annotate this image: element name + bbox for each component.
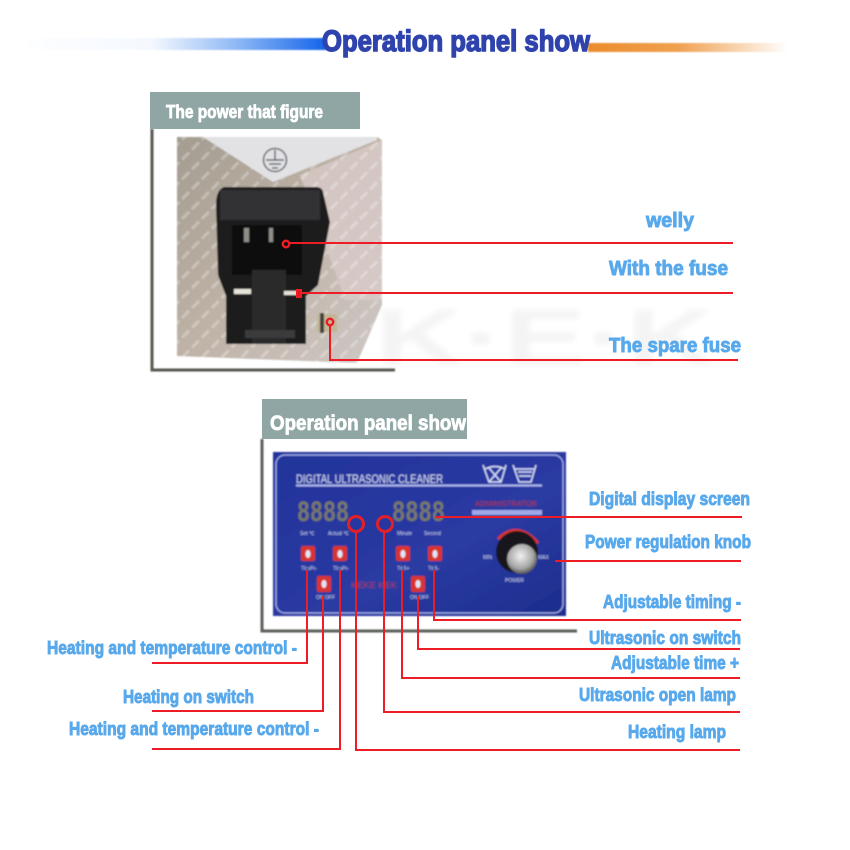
wash icons [483,465,536,482]
blue streak [10,38,326,50]
photo: blue control panel: ON OFF [410,595,429,601]
leader lines [152,243,742,750]
plug socket [216,187,330,344]
title banner [10,25,788,58]
photo: blue control panel: 8888 [392,497,445,531]
label: with the fuse: With the fuse [609,258,728,280]
panel: operation panel [262,399,577,631]
photo: blue control panel: ON OFF [316,595,335,601]
photo: blue control panel: MIN [483,555,493,561]
heading: The power that figure [166,102,323,122]
label: heating on switch: Heating on switch [123,687,254,707]
spare fuse [317,314,337,332]
photo: blue control panel: Second [424,531,441,537]
knob [498,530,538,543]
label: ultrasonic open lamp: Ultrasonic open lamp [579,685,736,705]
device name: DIGITAL ULTRASONIC CLEANER [296,472,443,486]
label: digital display: Digital display screen [589,489,750,509]
photo: blue control panel: MAX [538,555,550,561]
label: heating control two: Heating and temperature control - [69,719,319,739]
buttons [301,546,442,592]
label: welly: welly [645,210,695,232]
label: adjustable timing: Adjustable timing - [603,592,741,612]
label: power knob: Power regulation knob [585,532,751,552]
label: spare fuse: The spare fuse [609,335,741,357]
frame shadow [152,129,395,370]
photo: blue control panel: POWER [505,578,524,584]
photo: blue control panel: Tit 5- [428,566,440,572]
heading [150,92,360,129]
panel: power figure [150,92,395,370]
heading [262,399,467,439]
background watermark: K·E·K [375,293,715,382]
brand stamp: KEKE KEK [351,581,398,590]
icon: ground symbol [264,148,286,172]
photo: blue control panel: Actual ℃ [328,531,349,537]
marker dots [283,241,333,325]
orange streak [588,43,788,52]
labels [47,210,751,742]
label: ultrasonic on switch: Ultrasonic on switch [589,628,741,648]
photo: blue control panel [273,452,566,616]
photo: blue control panel: Minute [397,531,412,537]
photo: power socket [177,137,382,363]
photo: blue control panel: Tit 5+ [397,566,410,572]
photo: blue control panel: Tit sPr- [301,566,317,572]
displays: 8888 [297,497,349,531]
label: heating control one: Heating and temperature control - [47,638,297,658]
label: adjustable time plus: Adjustable time + [611,653,739,673]
small labels: Set ℃ [300,531,315,537]
photo: blue control panel: Tit sPr- [333,566,349,572]
model label: ADMINISTRATOR [475,501,537,508]
title: Operation panel show [322,25,591,58]
frame shadow [262,439,577,631]
label: heating lamp: Heating lamp [628,722,726,742]
pins [244,228,249,242]
heading: Operation panel show [270,412,467,435]
lamp circles [348,516,392,532]
